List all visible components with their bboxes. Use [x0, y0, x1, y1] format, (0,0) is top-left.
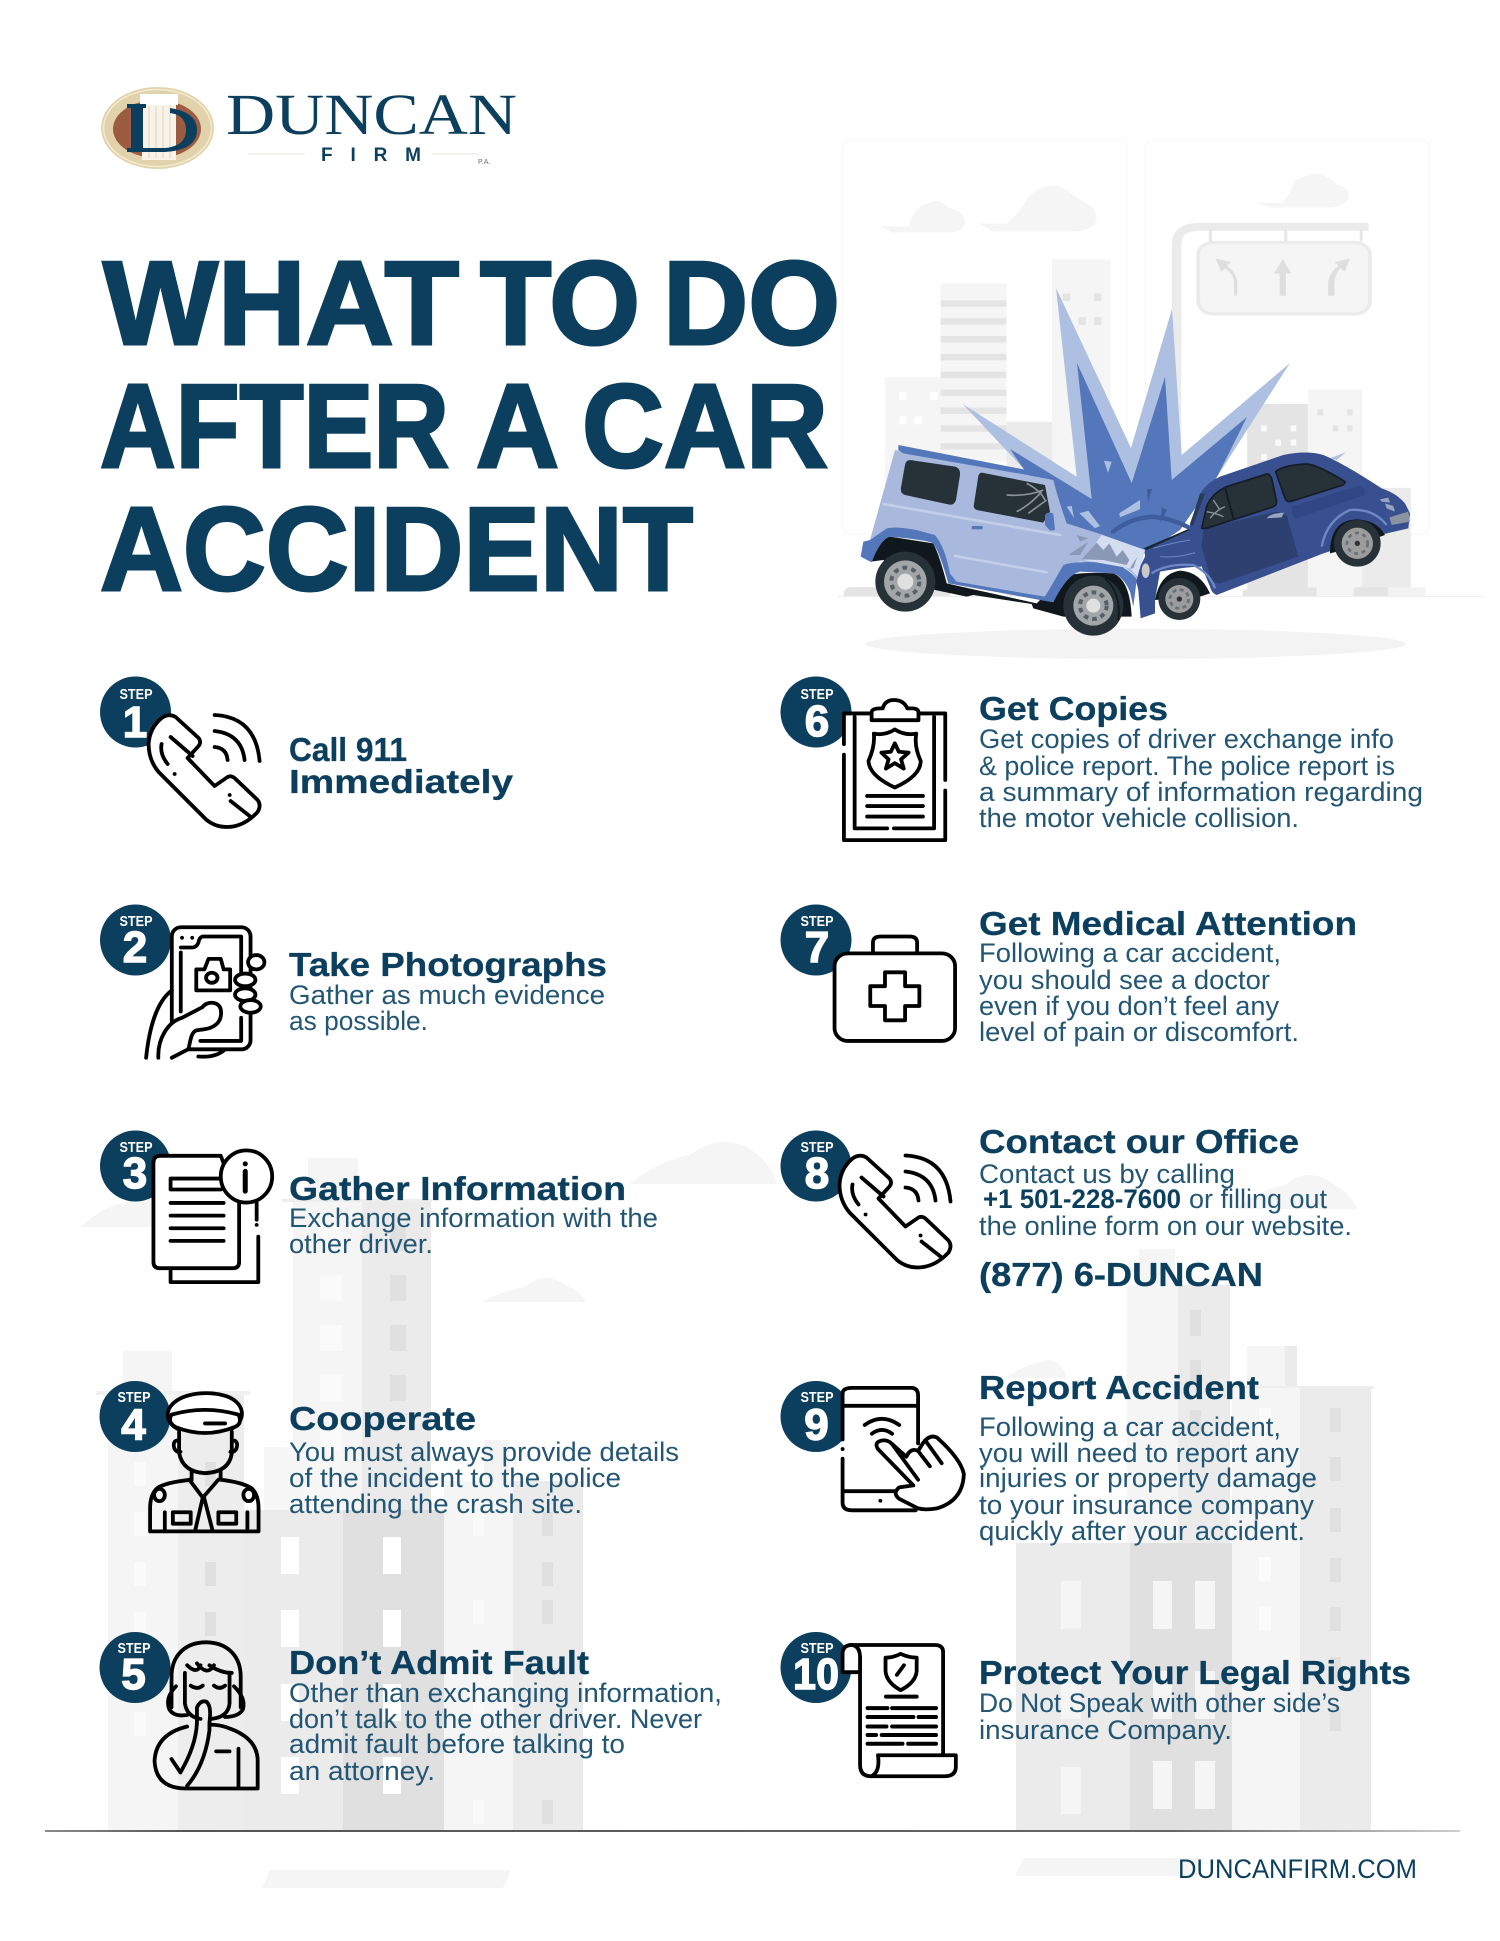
logo: Duncan Firm: [101, 82, 517, 169]
text: step 6: [979, 690, 1423, 833]
logo wordmark: DUNCAN: [226, 82, 517, 147]
text: step 5: admit fault before talking to: [289, 1729, 625, 1759]
text: step 7: you should see a doctor: [979, 965, 1270, 995]
icon: person with finger on lips: [155, 1642, 258, 1789]
logo sub-wordmark: FIRM: [321, 145, 421, 166]
background: faded clouds: [80, 1142, 1357, 1378]
badge: step 4: [100, 1381, 170, 1452]
text: step 8: (877) 6-DUNCAN: [979, 1256, 1263, 1293]
badge: step 3: [100, 1130, 171, 1202]
text: step 1: Immediately: [289, 763, 514, 800]
icon: hand holding phone: [146, 927, 264, 1058]
step 9: [780, 1369, 1317, 1546]
background: left city buildings: [96, 1158, 583, 1830]
text: step 3: Gather Information: [289, 1170, 626, 1207]
badge: step 9: STEP: [800, 1389, 834, 1406]
badge: step 8: [780, 1130, 852, 1202]
step 8: [780, 1123, 1352, 1293]
text: step 6: the motor vehicle collision.: [979, 803, 1299, 833]
background: right city buildings: [1016, 1249, 1374, 1830]
badge: step 2: [100, 904, 171, 976]
text: step 8: [979, 1123, 1352, 1293]
background: footer ground patches: [262, 1858, 1205, 1888]
text: step 6: Get copies of driver exchange info: [979, 724, 1394, 754]
badge: step 7: 7: [805, 923, 829, 972]
title: CAR: [582, 360, 828, 493]
footer website: DUNCANFIRM.COM: [1178, 1854, 1417, 1884]
badge: step 10: 10: [793, 1650, 839, 1699]
text: step 3: Exchange information with the: [289, 1203, 658, 1233]
icon: tablet with tapping hand: [843, 1388, 964, 1510]
text: step 9: [979, 1369, 1317, 1546]
text: step 7: [979, 905, 1357, 1047]
badge: step 5: 5: [121, 1650, 146, 1699]
badge: step 7: STEP: [800, 913, 834, 930]
explosion: [963, 288, 1346, 570]
badge: step 10: STEP: [800, 1640, 834, 1657]
step 5: [100, 1632, 722, 1789]
text: step 2: as possible.: [289, 1006, 428, 1036]
badge: step 5: STEP: [118, 1640, 150, 1657]
text: step 10: [979, 1654, 1411, 1745]
text: step 10: Protect Your Legal Rights: [979, 1654, 1411, 1691]
step 7: [780, 904, 1357, 1047]
text: step 8: Contact us by calling: [979, 1159, 1235, 1189]
text: step 7: level of pain or discomfort.: [979, 1017, 1299, 1047]
text: step 6: & police report. The police report is: [979, 751, 1395, 781]
impact streak: [1113, 517, 1188, 532]
badge: step 3: STEP: [120, 1139, 152, 1156]
text: step 7: Get Medical Attention: [979, 905, 1357, 942]
text: step 9: to your insurance company: [979, 1490, 1315, 1520]
badge: step 2: 2: [123, 923, 147, 972]
light blue SUV: [861, 445, 1145, 636]
step 4: [100, 1381, 679, 1531]
icon: police officer: [150, 1393, 259, 1531]
badge: step 9: [780, 1381, 852, 1452]
badge: step 2: STEP: [120, 913, 152, 930]
badge: step 4: STEP: [118, 1389, 150, 1406]
badge: step 5: [100, 1632, 170, 1703]
icon: legal scroll with shield: [843, 1645, 956, 1776]
text: step 7: Following a car accident,: [979, 938, 1281, 968]
text: step 4: [289, 1400, 679, 1519]
text: step 9: you will need to report any: [979, 1438, 1300, 1468]
step 10: [780, 1632, 1411, 1776]
text: step 9: injuries or property damage: [979, 1463, 1317, 1493]
text: step 9: Following a car accident,: [979, 1412, 1281, 1442]
text: step 3: [289, 1170, 658, 1259]
step 1: [100, 676, 514, 827]
small blue car: [1135, 452, 1410, 620]
icon: document with info: [153, 1150, 272, 1282]
badge: step 1: STEP: [120, 686, 152, 703]
text: step 3: other driver.: [289, 1229, 433, 1259]
footer rule: [45, 1830, 1460, 1832]
title: TO: [480, 237, 640, 370]
badge: step 1: [100, 676, 171, 748]
text: step 4: You must always provide details: [289, 1437, 679, 1467]
text: step 4: attending the crash site.: [289, 1489, 582, 1519]
text: step 5: Don’t Admit Fault: [289, 1644, 589, 1681]
hero background scene: [837, 140, 1484, 659]
text: step 7: even if you don’t feel any: [979, 991, 1280, 1021]
title: [100, 237, 840, 616]
text: step 5: [289, 1644, 722, 1786]
text: step 2: Gather as much evidence: [289, 980, 605, 1010]
title: AFTER: [100, 360, 449, 493]
text: step 8: Contact our Office: [979, 1123, 1299, 1160]
text: step 8: or filling out: [1189, 1184, 1328, 1214]
step 6: [780, 676, 1423, 840]
logo emblem: [101, 87, 214, 169]
badge: step 10: [780, 1632, 852, 1703]
text: step 5: don’t talk to the other driver. Never: [289, 1704, 702, 1734]
text: step 9: quickly after your accident.: [979, 1516, 1305, 1546]
text: step 5: Other than exchanging information,: [289, 1678, 722, 1708]
text: step 4: Cooperate: [289, 1400, 476, 1437]
text: step 6: a summary of information regarding: [979, 777, 1423, 807]
title: WHAT: [103, 237, 459, 370]
step 3: [100, 1130, 658, 1282]
title: DO: [663, 237, 840, 370]
text: step 5: an attorney.: [289, 1756, 435, 1786]
text: step 6: Get Copies: [979, 690, 1168, 727]
badge: step 7: [780, 904, 852, 976]
step 2: [100, 904, 607, 1058]
icon: first aid kit: [835, 937, 955, 1041]
text: step 8: the online form on our website.: [979, 1211, 1352, 1241]
title: A: [476, 360, 559, 493]
badge: step 3: 3: [123, 1149, 147, 1198]
text: step 1: [289, 731, 514, 800]
text: step 2: [289, 946, 607, 1036]
badge: step 6: 6: [805, 697, 829, 746]
text: step 10: Do Not Speak with other side’s: [979, 1688, 1340, 1718]
badge: step 1: 1: [123, 698, 147, 747]
badge: step 6: STEP: [800, 686, 834, 703]
text: step 10: insurance Company.: [979, 1715, 1232, 1745]
badge: step 6: [780, 676, 852, 748]
badge: step 4: 4: [121, 1400, 146, 1450]
text: step 2: Take Photographs: [289, 946, 607, 983]
hero illustration: car crash: [837, 140, 1484, 659]
badge: step 8: 8: [805, 1149, 829, 1198]
title: ACCIDENT: [100, 483, 693, 616]
text: step 9: Report Accident: [979, 1369, 1259, 1406]
icon: phone handset: [149, 715, 260, 827]
text: step 8: +1 501-228-7600: [983, 1184, 1181, 1214]
text: step 1: Call 911: [289, 731, 407, 768]
text: step 4: of the incident to the police: [289, 1463, 621, 1493]
icon: phone handset: [840, 1156, 950, 1268]
logo suffix: P.A.: [478, 159, 490, 166]
badge: step 8: STEP: [800, 1139, 834, 1156]
badge: step 9: 9: [804, 1400, 829, 1450]
icon: police report clipboard: [844, 700, 945, 840]
